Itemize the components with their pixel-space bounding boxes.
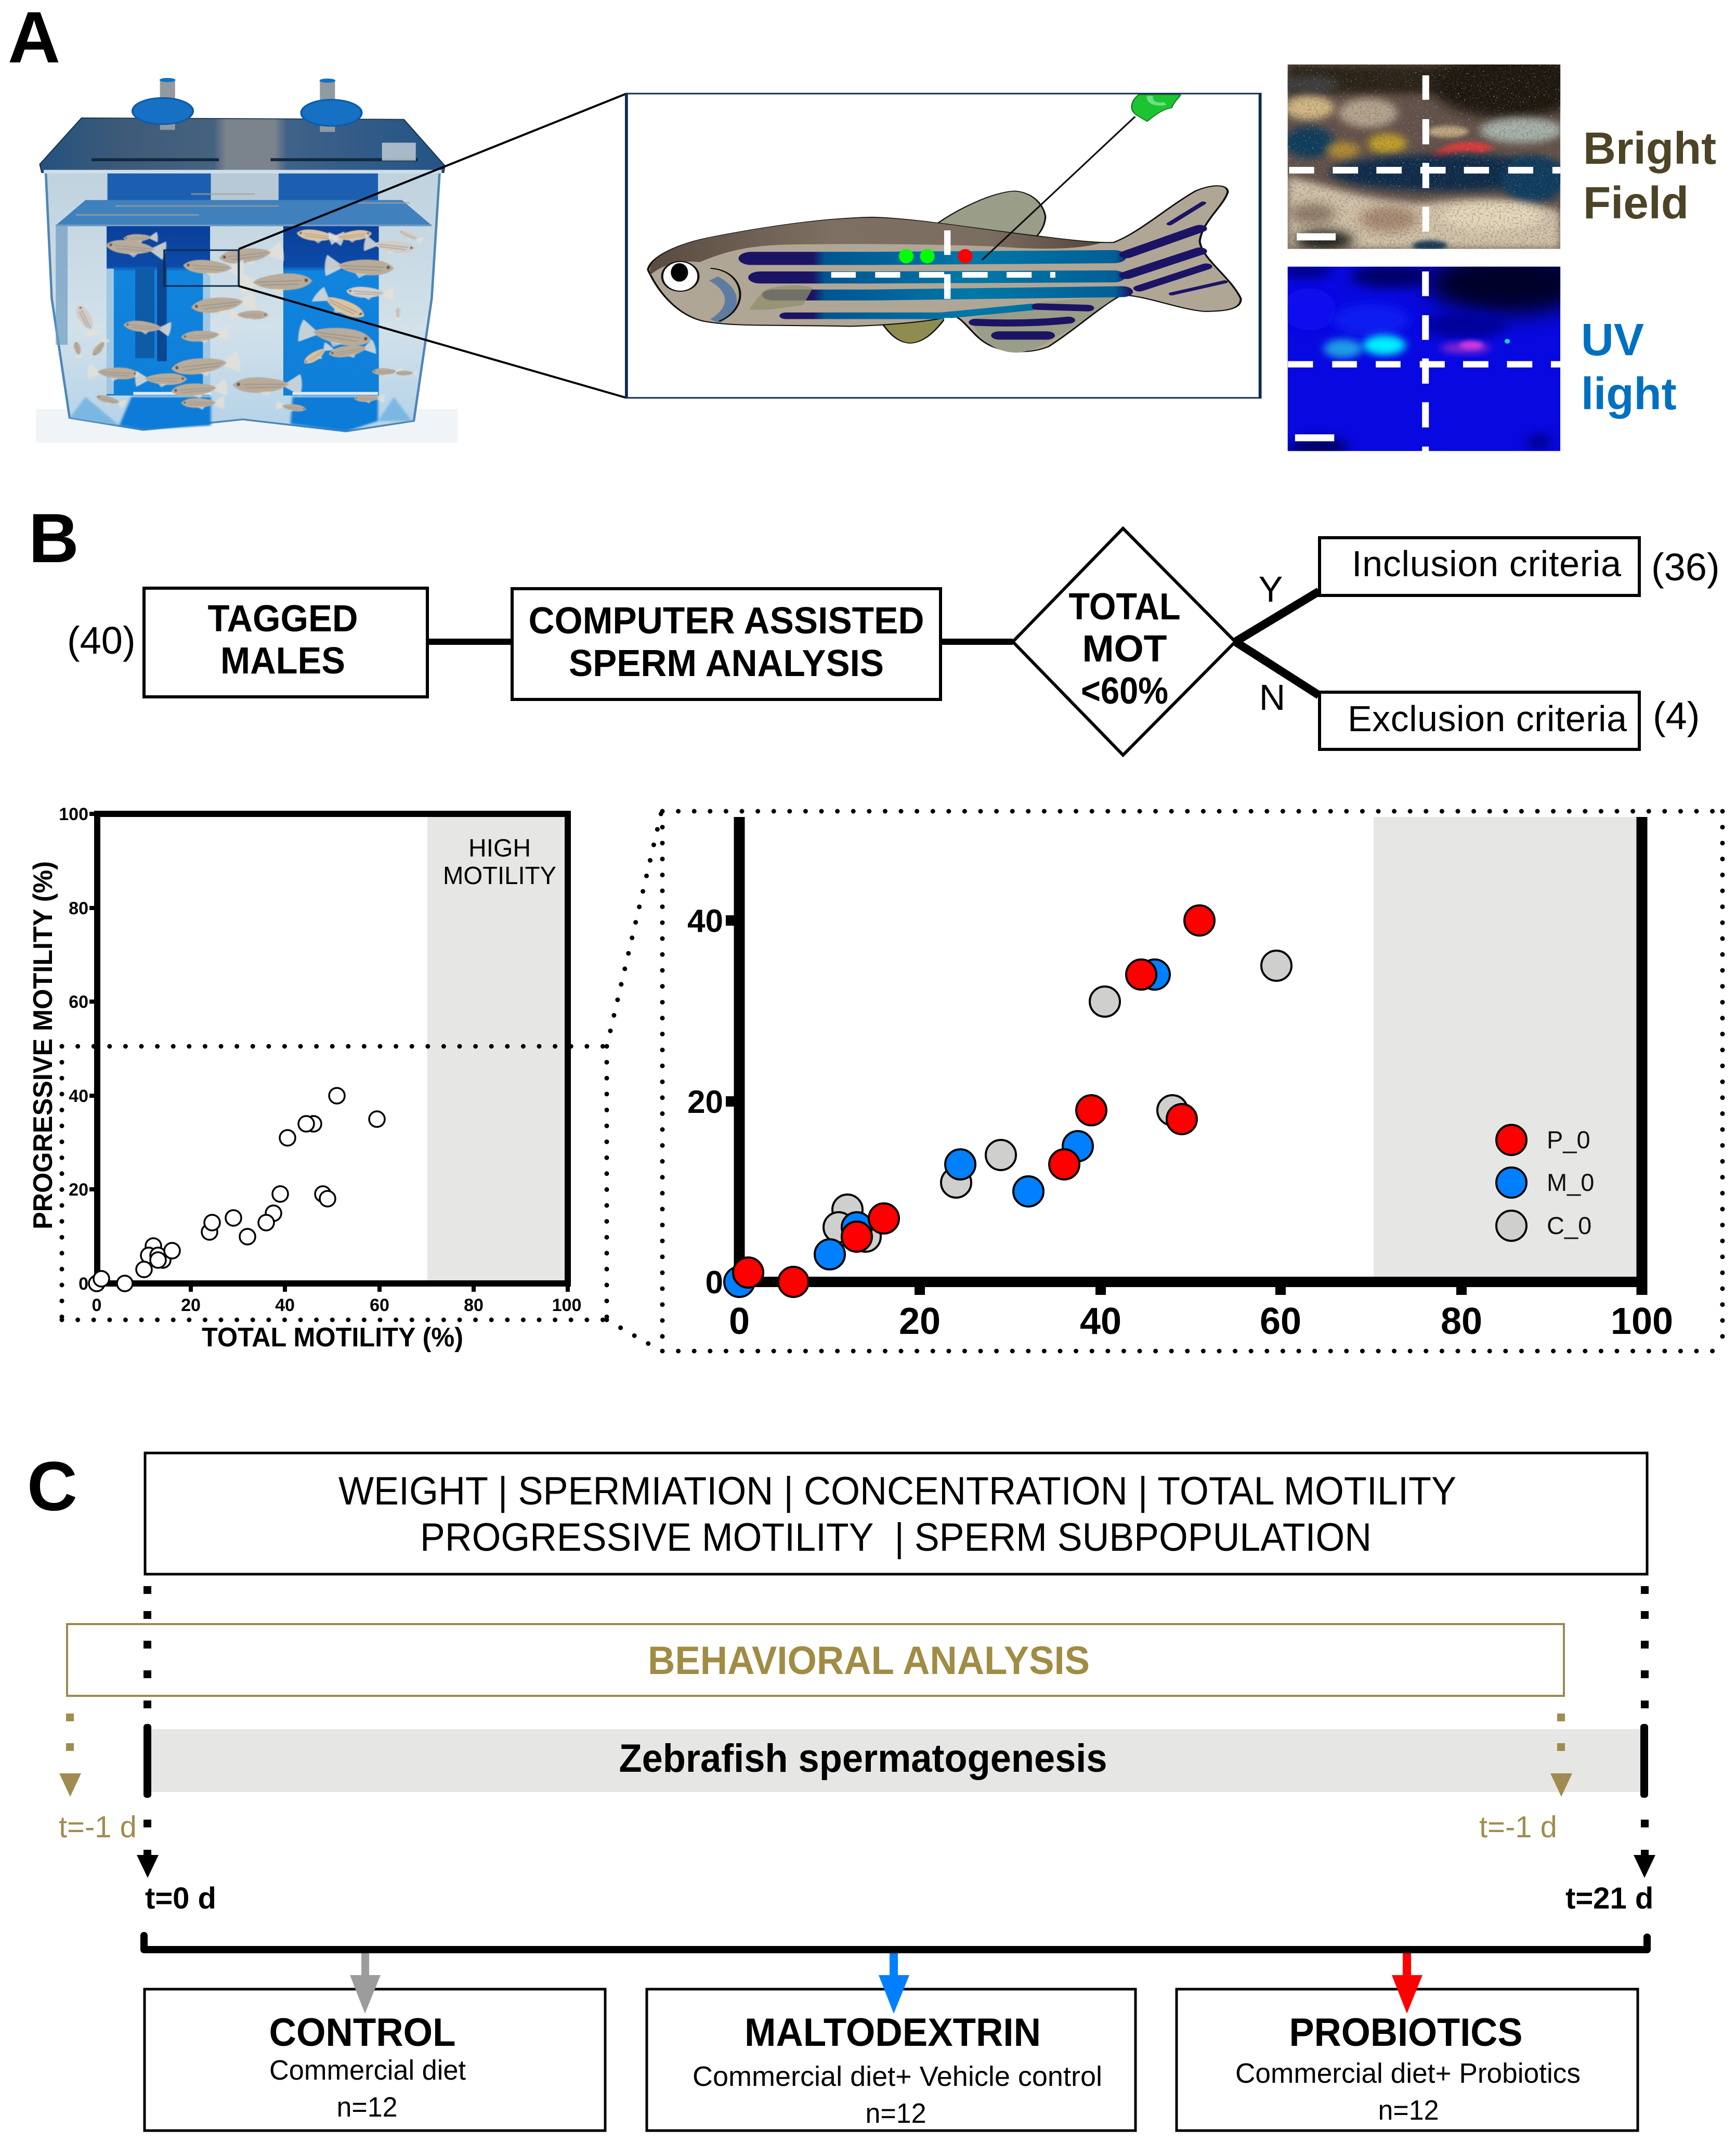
bar: zebrafish spermatogenesis <box>143 1724 1648 1798</box>
zoom lines from tank to fish <box>239 94 626 398</box>
box: computer assisted sperm analysis <box>512 589 941 699</box>
x tick labels: 100 <box>552 1295 581 1315</box>
box: probiotics group: n=12 <box>1378 2095 1439 2126</box>
box: behavioral analysis: BEHAVIORAL ANALYSIS <box>648 1639 1090 1683</box>
inset: tagged zebrafish illustration <box>626 94 1260 398</box>
arrow: red to probiotics <box>1392 1953 1422 2014</box>
box: control group: n=12 <box>337 2092 397 2123</box>
bracket to treatment groups <box>144 1936 1647 1950</box>
x tick labels: 20 <box>899 1301 941 1342</box>
decision diamond: TOTAL <box>1069 586 1180 628</box>
x tick labels: 20 <box>181 1295 201 1315</box>
box: measured endpoints: WEIGHT | SPERMIATION | CONCENTRATION | TOTAL MOTILITY <box>338 1469 1456 1513</box>
y tick labels: 0 <box>79 1274 88 1294</box>
box: exclusion criteria <box>1320 692 1639 749</box>
y tick labels: 40 <box>687 903 723 939</box>
box: inclusion criteria: Inclusion criteria <box>1352 543 1621 584</box>
box: maltodextrin group: n=12 <box>865 2098 926 2129</box>
y tick labels: 100 <box>59 805 88 824</box>
y tick labels: 60 <box>69 992 88 1012</box>
timeline arrow: t=0 d <box>137 1586 216 1915</box>
y tick labels: 0 <box>706 1265 723 1301</box>
x axis title: TOTAL MOTILITY (%) <box>202 1322 463 1353</box>
x tick labels: 40 <box>275 1295 295 1315</box>
label: UV light: UV <box>1581 315 1644 365</box>
label: UV light <box>1581 315 1677 419</box>
x tick labels <box>92 1295 581 1315</box>
panel label C: C <box>27 1448 77 1525</box>
decision diamond: <60% <box>1081 670 1168 712</box>
box: tagged males <box>144 588 427 697</box>
timeline arrow: t=0 d: t=0 d <box>145 1882 216 1915</box>
box: control group <box>145 1989 605 2131</box>
x tick labels: 60 <box>370 1295 389 1315</box>
box: control group: Commercial diet <box>269 2055 466 2086</box>
y tick labels: 40 <box>69 1086 88 1106</box>
legend: C_0 <box>1547 1212 1591 1239</box>
branch label Y: Y <box>1259 569 1283 609</box>
series P_0 red points <box>733 905 1215 1297</box>
x tick labels: 0 <box>92 1295 101 1315</box>
behavioral start arrow: t=-1 d: t=-1 d <box>59 1810 137 1844</box>
decision diamond <box>1013 528 1235 755</box>
y tick labels: 20 <box>687 1084 723 1120</box>
high motility label: MOTILITY <box>443 862 556 890</box>
open data points <box>89 1088 385 1291</box>
series C_0 grey points <box>824 951 1291 1252</box>
box: measured endpoints <box>145 1453 1647 1574</box>
box: behavioral analysis <box>67 1624 1564 1696</box>
box: computer assisted sperm analysis: SPERM ANALYSIS <box>569 643 884 684</box>
y tick labels: 80 <box>69 899 88 918</box>
label: UV light: light <box>1581 369 1677 419</box>
behavioral end arrow: t=-1 d: t=-1 d <box>1479 1810 1557 1844</box>
legend: P_0 <box>1547 1126 1590 1153</box>
x tick labels: 0 <box>729 1301 750 1342</box>
connector <box>427 639 1013 645</box>
box: probiotics group: Commercial diet+ Probiotics <box>1235 2058 1581 2089</box>
x tick labels: 100 <box>1611 1301 1673 1342</box>
y tick labels <box>59 805 88 1294</box>
photo: zebrafish breeding tank <box>36 78 458 443</box>
box: inclusion criteria <box>1320 538 1639 595</box>
box: probiotics group: PROBIOTICS <box>1289 2010 1522 2055</box>
box: maltodextrin group: Commercial diet+ Vehicle control <box>693 2061 1102 2092</box>
box: maltodextrin group: MALTODEXTRIN <box>745 2010 1041 2055</box>
x tick labels <box>729 1301 1673 1342</box>
box: measured endpoints: PROGRESSIVE MOTILITY | SPERM SUBPOPULATION <box>420 1515 1372 1560</box>
micrograph: UV light <box>1287 266 1561 451</box>
label: Bright Field: Field <box>1583 178 1689 228</box>
box: tagged males: TAGGED <box>208 598 358 640</box>
flowchart: tagged males to inclusion criteria <box>67 528 1720 755</box>
count 36: (36) <box>1651 546 1720 589</box>
count 4: (4) <box>1653 694 1700 737</box>
x tick labels: 80 <box>464 1295 484 1315</box>
branch lines <box>1235 591 1319 695</box>
box: computer assisted sperm analysis: COMPUTER ASSISTED <box>528 600 924 642</box>
timeline arrow: t=21 d <box>1565 1586 1655 1915</box>
box: tagged males: MALES <box>220 640 345 682</box>
legend: M_0 <box>1547 1169 1594 1196</box>
legend <box>1496 1125 1594 1241</box>
y axis title: PROGRESSIVE MOTILITY (%) <box>28 861 58 1229</box>
series M_0 blue points <box>724 959 1170 1297</box>
behavioral start arrow: t=-1 d <box>59 1714 137 1844</box>
chart: enlarged scatter by group <box>687 817 1673 1342</box>
y tick labels: 20 <box>69 1180 88 1200</box>
x tick labels: 60 <box>1260 1301 1301 1342</box>
decision diamond: MOT <box>1082 628 1167 670</box>
label: Bright Field <box>1583 123 1716 228</box>
box: exclusion criteria: Exclusion criteria <box>1348 698 1627 739</box>
panel label B: B <box>29 500 79 577</box>
chart: scatter of total vs progressive motility <box>28 805 581 1353</box>
x tick labels: 40 <box>1080 1301 1121 1342</box>
x tick labels: 80 <box>1441 1301 1482 1342</box>
arrow: grey to control <box>350 1953 381 2014</box>
branch label N: N <box>1259 677 1285 718</box>
high motility label: HIGH <box>468 835 531 862</box>
count 40: (40) <box>67 619 136 662</box>
micrograph: bright field <box>1287 64 1561 249</box>
timeline arrow: t=21 d: t=21 d <box>1565 1882 1653 1915</box>
arrow: blue to maltodextrin <box>879 1953 909 2014</box>
behavioral end arrow: t=-1 d <box>1479 1714 1572 1844</box>
box: maltodextrin group <box>647 1989 1135 2131</box>
high motility label <box>443 835 556 890</box>
box: probiotics group <box>1177 1989 1638 2131</box>
box: control group: CONTROL <box>269 2010 455 2055</box>
y tick labels <box>687 903 723 1301</box>
label: Bright Field: Bright <box>1583 123 1716 174</box>
bar: zebrafish spermatogenesis: Zebrafish spermatogenesis <box>619 1736 1107 1781</box>
dotted zoom selection and connectors <box>62 811 1722 1351</box>
